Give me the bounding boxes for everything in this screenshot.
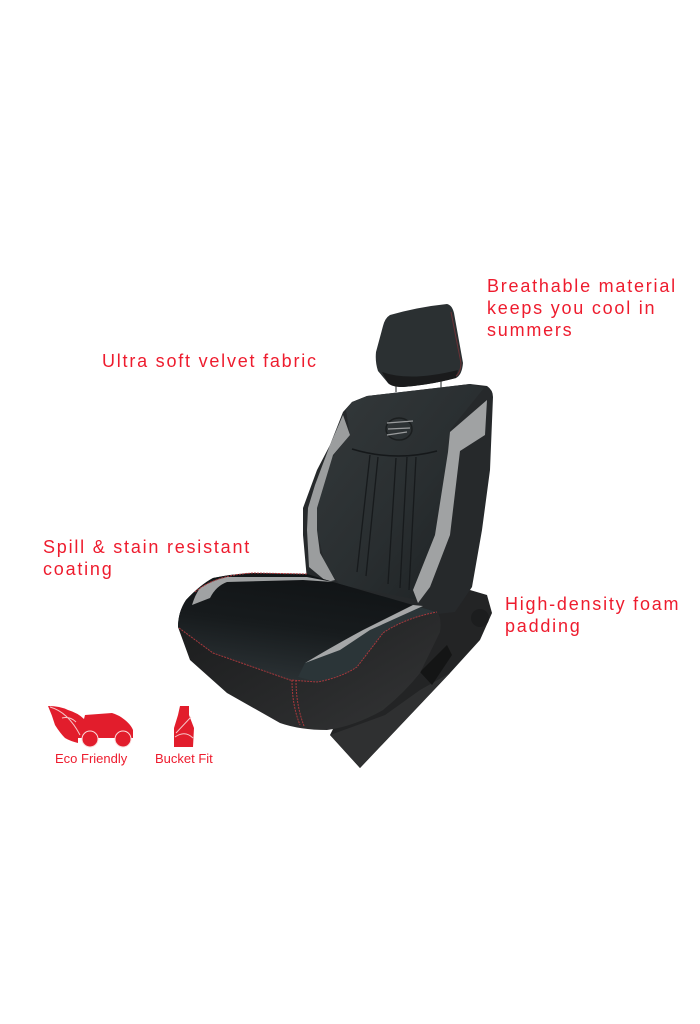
icon: eco friendly car with leaf [48,706,133,747]
headrest posts [396,381,441,392]
grey side trim front [305,605,423,663]
callout: velvet fabric: Ultra soft velvet fabric [102,351,318,371]
icon: bucket fit seat [174,706,194,747]
pleat lines [357,455,416,590]
grey rear trim [192,577,333,605]
callout: foam padding: High-density foam [505,594,680,614]
logo emblem [386,418,413,440]
callout: spill and stain [43,537,251,579]
callout: foam padding: padding [505,616,582,636]
headrest [376,304,463,387]
backrest [303,384,493,616]
callout: breathable material: Breathable material [487,276,677,296]
callout: breathable material: keeps you cool in [487,298,656,318]
red stitching [179,573,437,726]
callout: breathable material [487,276,677,340]
right grey bolster [413,400,487,603]
callout: breathable material: summers [487,320,573,340]
callout: spill and stain: Spill & stain resistant [43,537,251,557]
centre velvet panel [317,384,484,600]
callout: spill and stain: coating [43,559,114,579]
label: bucket fit: Bucket Fit [155,751,213,766]
seat rail and recline mechanism [330,590,492,768]
cushion velvet top [178,573,437,682]
label: eco friendly: Eco Friendly [55,751,127,766]
cushion side panel [298,605,437,682]
callout: foam padding [505,594,680,636]
seat cushion [178,573,441,730]
centre panel yoke seam [352,449,437,456]
left grey bolster [307,415,350,582]
